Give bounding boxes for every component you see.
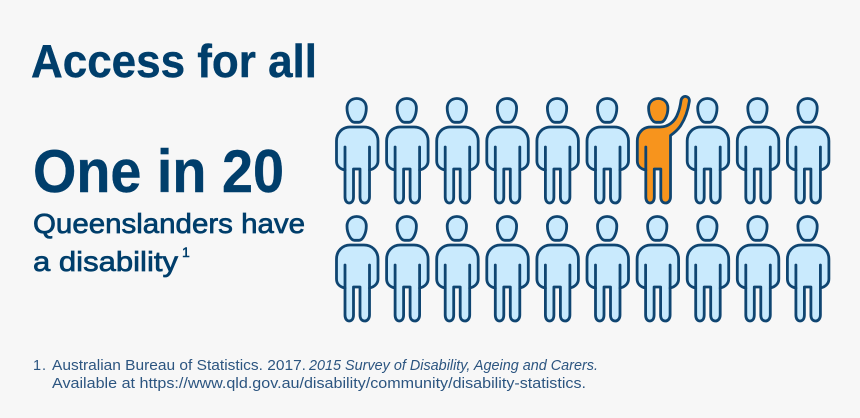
row 1 of people	[336, 96, 829, 203]
footnote: 1.	[33, 358, 46, 374]
footnote: Available at https://www.qld.gov.au/disability/community/disability-statistics.	[52, 376, 586, 392]
statistic description: Queenslanders have	[33, 208, 305, 239]
footnote: Australian Bureau of Statistics. 2017.	[52, 358, 306, 374]
statistic description	[33, 208, 305, 277]
statistic description: 1	[182, 244, 190, 260]
statistic description: a disability	[33, 246, 178, 277]
footnote	[33, 358, 598, 392]
icon: highlighted orange person with raised arm	[637, 96, 689, 203]
big statistic: One in 20	[33, 138, 284, 205]
pictogram: one in twenty people	[336, 96, 829, 321]
title: Access for all	[31, 35, 317, 87]
row 2 of people	[336, 216, 829, 321]
footnote: 2015 Survey of Disability, Ageing and Carers.	[308, 358, 598, 374]
